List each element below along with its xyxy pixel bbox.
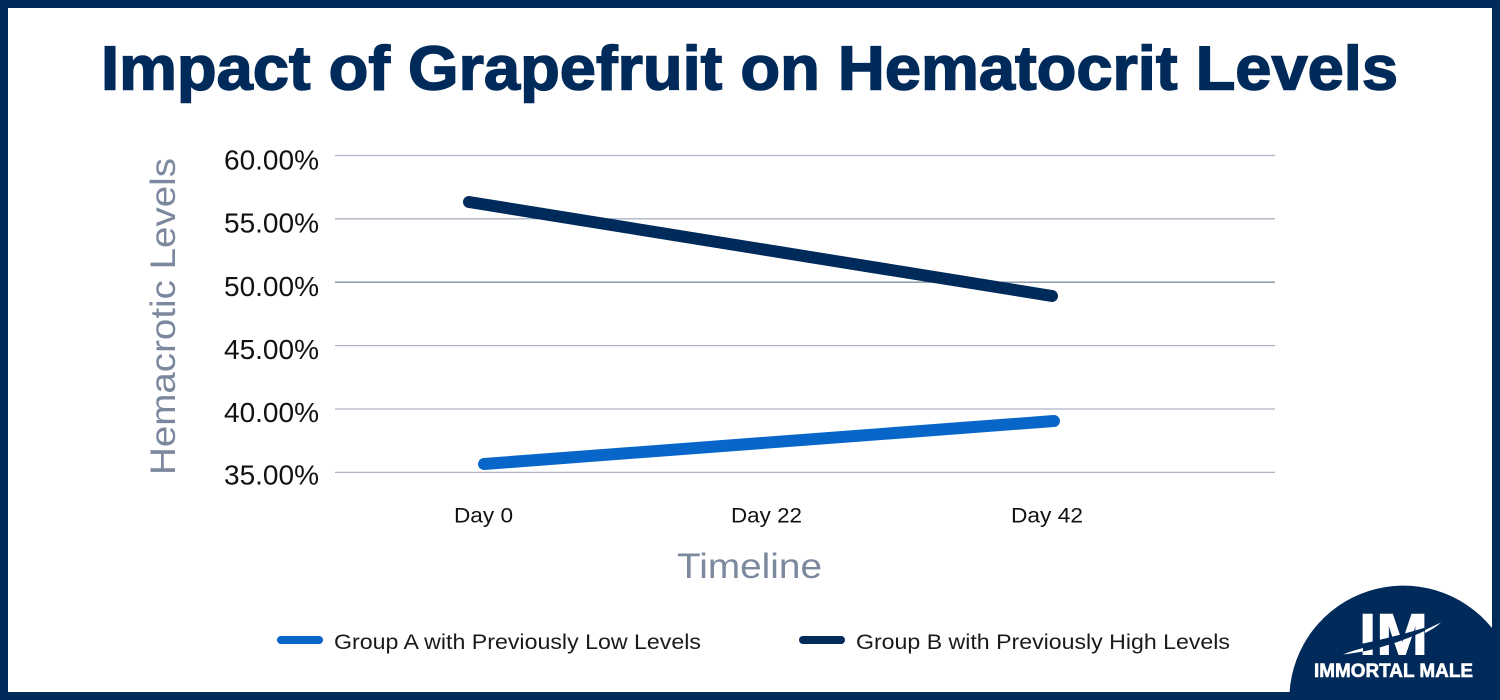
x-axis labels: Day 22 bbox=[731, 504, 802, 528]
legend: Group A: Group A with Previously Low Levels bbox=[334, 631, 701, 654]
y-axis labels: 35.00% bbox=[224, 460, 319, 490]
logo swoosh bbox=[1343, 622, 1441, 654]
y-axis labels bbox=[224, 144, 319, 490]
x-axis title: Timeline bbox=[677, 547, 822, 586]
legend: Group B: Group B with Previously High Levels bbox=[856, 631, 1230, 654]
title: Impact of Grapefruit on Hematocrit Levels bbox=[101, 34, 1398, 104]
y-axis title: Hemacrotic Levels bbox=[144, 158, 183, 475]
series: Group B bbox=[469, 202, 1052, 296]
legend bbox=[281, 631, 1230, 654]
series: Group A bbox=[484, 421, 1054, 464]
x-axis labels bbox=[454, 504, 1083, 528]
logo wordmark: IMMORTAL MALE bbox=[1314, 661, 1473, 682]
logo: Immortal Male bbox=[1290, 586, 1492, 693]
y-axis labels: 60.00% bbox=[224, 144, 319, 176]
y-axis labels: 40.00% bbox=[224, 397, 319, 428]
logo monogram: IM bbox=[1359, 602, 1428, 668]
x-axis labels: Day 0 bbox=[454, 504, 513, 528]
logo badge bbox=[1290, 586, 1492, 693]
x-axis labels: Day 42 bbox=[1011, 504, 1083, 528]
line chart bbox=[144, 144, 1275, 586]
grid lines bbox=[335, 156, 1275, 472]
y-axis labels: 50.00% bbox=[224, 271, 319, 302]
y-axis labels: 45.00% bbox=[224, 334, 319, 365]
y-axis labels: 55.00% bbox=[224, 208, 319, 239]
